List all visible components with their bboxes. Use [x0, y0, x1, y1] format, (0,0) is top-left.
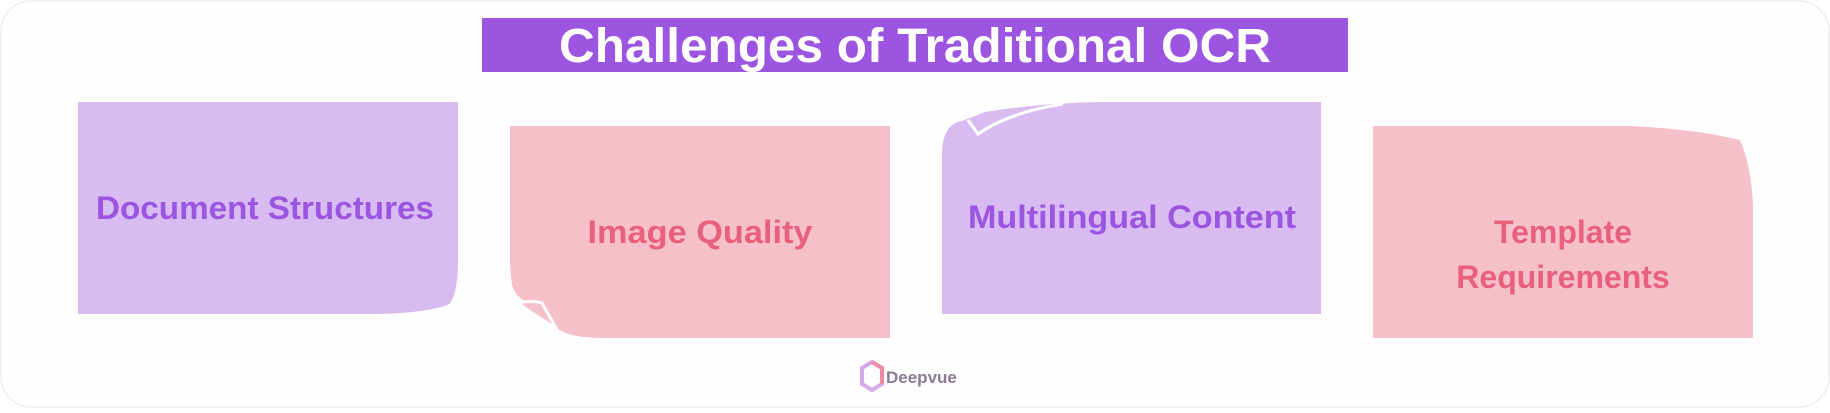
panel: template requirements: Template — [1494, 214, 1632, 250]
logo: Deepvue: Deepvue — [886, 368, 957, 387]
icon: hexagon logo — [862, 362, 882, 390]
logo: Deepvue — [862, 362, 957, 390]
panel: document structures — [78, 102, 458, 314]
panel: multilingual content — [942, 102, 1321, 314]
panel: document structures: Document Structures — [96, 190, 434, 226]
panel: multilingual content: Multilingual Content — [968, 199, 1296, 235]
panel: template requirements — [1373, 126, 1753, 338]
panel: image quality: Image Quality — [588, 214, 813, 250]
title: Challenges of Traditional OCR — [559, 20, 1271, 73]
panel: template requirements: Requirements — [1456, 259, 1670, 295]
panel: image quality — [510, 126, 890, 338]
